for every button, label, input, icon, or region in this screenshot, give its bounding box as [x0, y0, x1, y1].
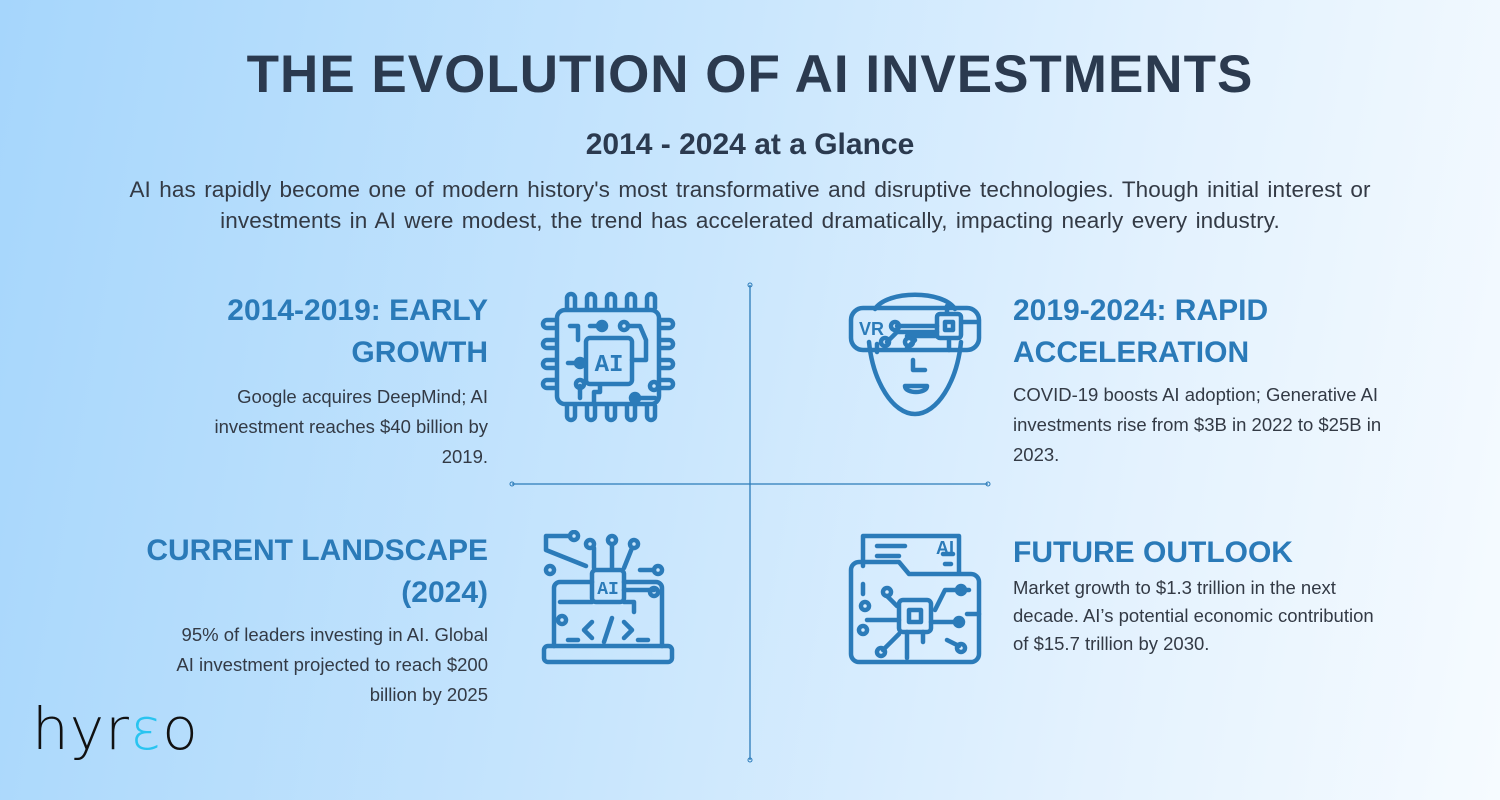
text: current landscape: 95% of leaders investing in AI. Global	[182, 624, 488, 645]
text: rapid acceleration	[1013, 384, 1381, 465]
intro text	[129, 177, 1371, 233]
text: current landscape: billion by 2025	[370, 684, 488, 705]
heading: early growth: 2014-2019: EARLY	[227, 294, 488, 327]
icon: AI laptop	[542, 530, 674, 664]
text: future outlook	[1013, 577, 1374, 654]
heading: rapid acceleration	[1013, 294, 1268, 369]
heading: future outlook: FUTURE OUTLOOK	[1013, 536, 1293, 569]
icon: AI folder: AI	[936, 538, 954, 558]
icon: VR head: VR	[859, 319, 884, 339]
text: current landscape	[176, 624, 488, 705]
text: early growth: investment reaches $40 billion by	[214, 416, 488, 437]
text: early growth	[214, 386, 488, 467]
panel: current landscape	[146, 534, 488, 705]
text: future outlook: decade. AI’s potential economic contribution	[1013, 605, 1374, 626]
icon: AI chip	[540, 292, 676, 422]
title: THE EVOLUTION OF AI INVESTMENTS	[247, 45, 1253, 104]
icon: AI laptop: AI	[597, 580, 619, 600]
intro text: investments in AI were modest, the trend has accelerated dramatically, impacting nearly every industry.	[220, 208, 1280, 233]
heading: current landscape: (2024)	[401, 576, 488, 609]
text: rapid acceleration: investments rise from $3B in 2022 to $25B in	[1013, 414, 1381, 435]
heading: rapid acceleration: ACCELERATION	[1013, 336, 1249, 369]
text: future outlook: of $15.7 trillion by 2030.	[1013, 633, 1209, 654]
icon: VR head	[848, 292, 982, 416]
icon: AI folder	[848, 534, 982, 664]
subtitle: 2014 - 2024 at a Glance	[586, 128, 914, 161]
heading: rapid acceleration: 2019-2024: RAPID	[1013, 294, 1268, 327]
intro text: AI has rapidly become one of modern history's most transformative and disruptive technologies. Though initial interest or	[129, 177, 1371, 202]
text: rapid acceleration: 2023.	[1013, 444, 1059, 465]
heading: current landscape: CURRENT LANDSCAPE	[146, 534, 488, 567]
text: current landscape: AI investment projected to reach $200	[176, 654, 488, 675]
text: early growth: Google acquires DeepMind; AI	[237, 386, 488, 407]
panel: rapid acceleration	[1013, 294, 1381, 465]
text: early growth: 2019.	[442, 446, 488, 467]
panel: early growth	[214, 294, 488, 467]
icon: AI chip: AI	[595, 352, 623, 379]
text: rapid acceleration: COVID-19 boosts AI adoption; Generative AI	[1013, 384, 1378, 405]
logo: hyreo: hyrɛo	[32, 695, 199, 763]
heading: early growth	[227, 294, 488, 369]
heading: early growth: GROWTH	[351, 336, 488, 369]
panel: future outlook	[1013, 536, 1374, 654]
heading: current landscape	[146, 534, 488, 609]
text: future outlook: Market growth to $1.3 trillion in the next	[1013, 577, 1336, 598]
